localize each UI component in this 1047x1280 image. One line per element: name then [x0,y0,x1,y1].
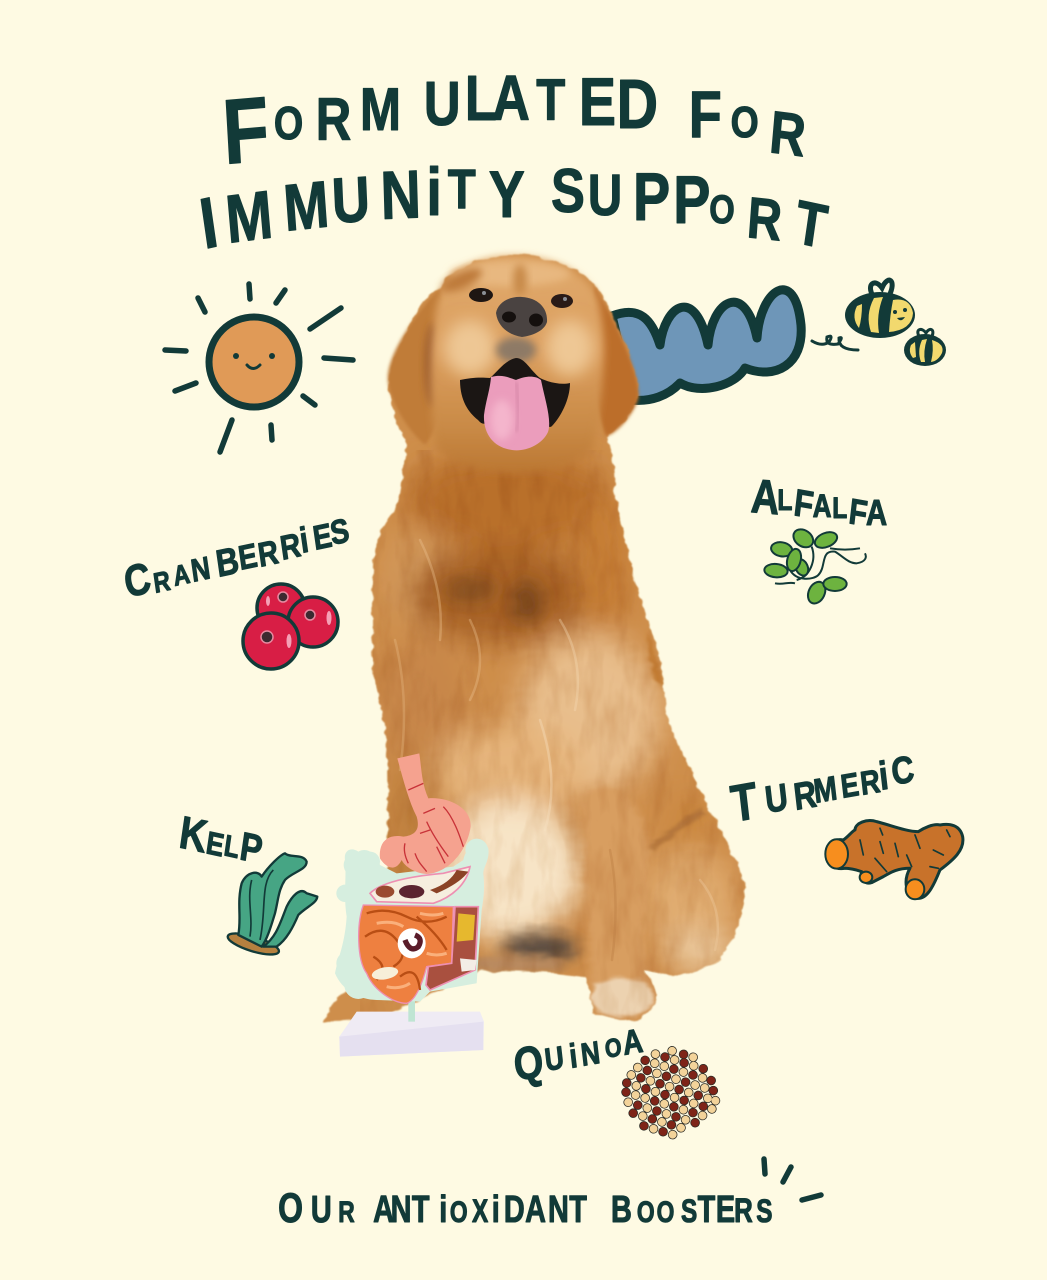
label: turmeric: i [877,753,891,799]
left ear [388,288,448,445]
right ear [592,285,638,436]
label: alfalfa: L [832,491,847,525]
label: cranberries: R [256,533,281,575]
label: quinoa: N [579,1036,602,1074]
title line 2: S [551,157,585,226]
title line 1: O [731,98,759,147]
label: cranberries: R [152,566,172,599]
label: alfalfa: F [847,491,869,534]
caption: S [681,1194,697,1230]
label: turmeric: T [728,772,760,834]
label: cranberries: E [236,536,260,578]
model base [339,1012,484,1057]
accent marks [764,1159,821,1200]
label: kelp: K [177,806,211,862]
label: quinoa: U [543,1041,566,1079]
label: alfalfa: A [866,492,887,533]
title line 1: T [536,69,565,133]
caption: T [569,1188,587,1231]
photo: digestive system model [335,753,489,1057]
label: cranberries: B [213,540,242,586]
label: cranberries: E [311,516,334,558]
fur strands [395,540,718,960]
belly shadow [502,934,578,962]
icon: cloud [612,290,801,400]
title line 1: F [689,77,722,151]
caption: E [716,1188,735,1231]
caption: U [311,1188,332,1231]
title line 1: A [492,63,530,134]
label: alfalfa: F [792,483,816,527]
label: quinoa: A [621,1021,645,1063]
label: kelp: P [237,823,265,872]
caption: i [492,1188,500,1231]
eyes [469,288,493,302]
label: kelp: L [222,828,242,865]
caption: N [548,1188,569,1231]
icon: quinoa seeds [616,1041,726,1144]
icon: alfalfa sprouts [764,526,866,606]
fur texture overlay [360,450,760,1030]
label: quinoa: Q [511,1035,546,1091]
label: turmeric: R [792,774,819,819]
title line 1: O [274,97,303,149]
caption: X [472,1194,488,1230]
transverse colon section [370,867,470,903]
caption: R [338,1195,355,1229]
title line 2: I [195,181,223,264]
caption: D [504,1188,525,1231]
label: turmeric: U [763,777,790,822]
title line 2: i [426,155,442,230]
icon: bees and flight trail [812,280,946,366]
caption: R [734,1193,753,1230]
title line 1: F [220,77,272,184]
colon [335,839,489,1002]
label: cranberries: N [189,551,212,590]
label: alfalfa: A [813,490,832,525]
caption: T [412,1188,430,1231]
photo: golden retriever [310,240,760,1040]
caption: i [439,1188,447,1231]
chest dark patches [511,580,543,624]
caption: A [525,1188,546,1231]
caption: N [391,1188,411,1231]
open mouth [460,358,570,427]
caption: S [756,1194,772,1230]
label: cranberries: R [278,526,303,568]
small intestine [359,905,453,1003]
icon: small bee [904,329,946,366]
title line 1: R [767,98,808,170]
title line 2: T [448,158,476,220]
icon: large bee [845,280,915,338]
label: kelp: E [204,826,226,864]
colon interior [426,907,478,990]
caption: A [373,1188,394,1231]
caption: O [278,1184,303,1231]
label: turmeric: C [889,749,916,794]
face [430,256,604,472]
stand post [408,993,415,1022]
caption: O [637,1195,655,1229]
title line 2: N [380,157,422,234]
label: alfalfa: L [777,483,792,517]
label: quinoa: O [603,1032,623,1064]
label: alfalfa: A [750,469,781,525]
label: cranberries: C [120,553,154,608]
title line 1: L [465,63,497,134]
caption: O [450,1195,468,1229]
shoulder patch [646,635,664,688]
infographic canvas [125,75,964,1223]
icon: sun [165,284,353,452]
tongue [484,376,549,450]
title line 1: D [617,65,658,143]
title line 1: E [579,65,616,140]
title line 2: U [330,164,371,237]
label: cranberries: A [171,559,192,592]
caption: O [657,1195,674,1229]
title line 2: U [588,164,622,228]
caption: B [611,1188,632,1231]
label: cranberries: S [328,511,352,553]
title line 2: M [223,177,275,258]
label: turmeric: R [859,763,882,803]
title line 2: O [709,187,735,232]
intestine cross-section [398,928,426,958]
flight trail [812,336,858,350]
title line 2: P [673,163,710,238]
dog head [388,256,638,472]
icon: cranberries [243,584,338,669]
title line 2: P [633,160,670,235]
dog body and fur [310,240,760,1040]
label: turmeric: E [839,767,861,806]
stomach [380,753,471,874]
title line 2: R [745,186,784,254]
title line 1: U [424,70,461,139]
title line 2: Y [489,157,525,231]
haunch line [650,810,705,850]
title line 2: M [281,166,331,245]
label: cranberries: i [297,519,311,561]
title [195,63,832,264]
title line 1: R [316,85,351,153]
front leg [585,787,655,1015]
nose [496,297,547,337]
label: quinoa: i [567,1036,579,1076]
title line 2: T [791,188,832,263]
title line 1: M [360,75,401,143]
icon: turmeric root [825,821,963,899]
caption: T [698,1188,716,1231]
icon: kelp seaweed [226,853,317,959]
label: turmeric: M [812,769,839,811]
paw [591,977,653,1017]
